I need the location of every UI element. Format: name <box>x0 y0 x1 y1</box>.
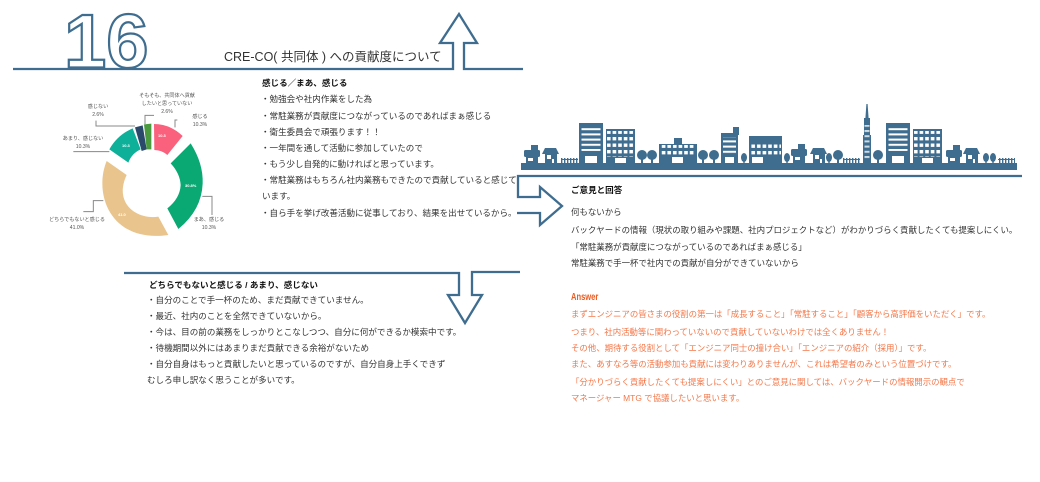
label: 感じない: 2.6% <box>92 112 104 118</box>
label: どちらでもないと感じる: どちらでもないと感じる <box>49 217 105 223</box>
text block: answer: 「分かりづらく貢献したくても提案しにくい」とのご意見に関しては、バックヤードの情報開示の観点で <box>571 377 965 387</box>
donut chart <box>73 114 212 236</box>
title: CRE-CO( 共同体 ) への貢献度について <box>224 50 442 64</box>
label: 感じる: 10.3% <box>193 122 207 128</box>
right office buildings <box>886 123 942 163</box>
text block: neutral and negative opinions <box>147 280 461 385</box>
right arrow <box>517 176 1022 225</box>
text block: positive opinions: ・もう少し自発的に動ければと思っています。 <box>261 159 439 169</box>
label: そもそも <box>139 92 195 115</box>
text block: positive opinions <box>261 78 517 218</box>
text block: neutral and negative opinions: ・待機期間以外にはあまりまだ貢献できる余裕がないため <box>147 343 369 353</box>
text block: neutral and negative opinions: ・今は、目の前の業務をしっかりとこなしつつ、自分に何ができるか模索中です。 <box>147 327 461 337</box>
right houses <box>946 145 1015 164</box>
header rule with up arrow <box>13 14 523 69</box>
text block: positive opinions: ・常駐業務が貢献度につながっているのであればまぁ感じる <box>261 111 491 121</box>
segment: 感じる <box>154 124 183 155</box>
label: どちらでもないと感じる <box>49 216 105 231</box>
left houses <box>524 145 578 164</box>
text block: answer: つまり、社内活動等に関わっていないので貢献していないわけでは全くありません！ <box>571 327 889 337</box>
text block: opinions and replies: バックヤードの情報（現状の取り組みや課題、社内プロジェクトなど）がわかりづらく貢献したくても提案しにくい。 <box>571 225 1017 235</box>
chart labels <box>49 92 224 231</box>
tower <box>863 104 883 164</box>
text block: positive opinions: ・自ら手を挙げ改善活動に従事しており、結果を出せているから。 <box>261 208 517 218</box>
text block: answer: マネージャー MTG で協議したいと思います。 <box>571 393 744 403</box>
label: まあ、感じる: まあ、感じる <box>194 217 224 223</box>
segment: 感じない <box>135 125 147 151</box>
down arrow <box>124 272 520 323</box>
label: あまり、感じない: あまり、感じない <box>63 136 103 142</box>
label: 感じる: 感じる <box>192 114 208 120</box>
label: 感じる <box>192 114 208 128</box>
segment value: 感じる: 10.3 <box>158 133 166 138</box>
left office buildings <box>579 123 635 163</box>
trees and school <box>637 138 719 164</box>
answer heading: Answer <box>571 291 598 303</box>
segment: まあ、感じる <box>167 143 203 229</box>
segment value: まあ: 30.8% <box>185 183 196 188</box>
label: そもそも: 2.6% <box>161 109 173 115</box>
text block: answer: また、あすなろ等の活動参加も貢献には変わりありませんが、これは希望者のみという位置づけです。 <box>571 359 956 369</box>
section number 16: 16 <box>64 0 149 84</box>
text block: positive opinions: います。 <box>262 191 295 201</box>
segment value: あまり: 10.3 <box>122 143 130 148</box>
label: そもそも: そもそも、共同体へ貢献 <box>139 93 195 99</box>
text block: opinions and replies: 「常駐業務が貢献度につながっているのであればまぁ感じる」 <box>571 242 807 252</box>
text block: opinions and replies: 常駐業務で手一杯で社内での貢献が自分ができていないから <box>571 258 799 268</box>
segment value: どちら: 41.0 <box>118 212 126 217</box>
label: 感じない: 感じない <box>88 104 108 110</box>
heading: どちらでもないと感じる / あまり、感じない <box>149 280 318 290</box>
label: どちらでもないと感じる: 41.0% <box>70 225 84 231</box>
heading: 感じる／まあ、感じる <box>262 78 347 88</box>
leader lines <box>73 115 212 215</box>
label: まあ、感じる <box>194 216 224 231</box>
text block: positive opinions: ・常駐業務はもちろん社内業務もできたので貢献していると感じて <box>261 175 517 185</box>
middle buildings <box>721 127 782 164</box>
text block: neutral and negative opinions: むしろ申し訳なく思うことが多いです。 <box>147 375 300 385</box>
segment: あまり、感じない <box>109 128 141 163</box>
text block: neutral and negative opinions: ・最近、社内のことを全然できていないから。 <box>147 311 326 321</box>
text block: answer: まずエンジニアの皆さまの役割の第一は「成長すること」「常駐すること」「顧客から高評価をいただく」です。 <box>571 309 990 319</box>
text block: positive opinions: ・衛生委員会で頑張ります！！ <box>261 127 381 137</box>
text block: positive opinions: ・一年間を通して活動に参加していたので <box>261 143 423 153</box>
central houses <box>784 144 860 164</box>
label: そもそも: したいと思っていない <box>142 101 192 107</box>
heading: ご意見と回答 <box>571 185 622 195</box>
text block: neutral and negative opinions: ・自分のことで手一杯のため、まだ貢献できていません。 <box>147 295 369 305</box>
text block: positive opinions: ・勉強会や社内作業をした為 <box>261 94 372 104</box>
text block: answer <box>571 291 990 403</box>
label: あまり、感じない <box>63 136 103 150</box>
segment: そもそも <box>144 124 151 149</box>
city skyline <box>521 104 1017 170</box>
segment: どちらでもないと感じる <box>102 161 168 236</box>
text block: neutral and negative opinions: ・自分自身はもっと貢献したいと思っているのですが、自分自身上手くできず <box>147 359 445 369</box>
label: あまり、感じない: 10.3% <box>76 144 90 150</box>
text block: answer: その他、期待する役割として「エンジニア同士の撞け合い」「エンジニアの紹介（採用）」です。 <box>571 343 931 353</box>
text block: opinions and replies: 何もないから <box>571 207 622 217</box>
label: 感じない <box>88 104 108 118</box>
label: まあ、感じる: 10.3% <box>202 225 216 231</box>
text block: opinions and replies <box>571 185 1017 268</box>
ground band <box>521 163 1017 170</box>
